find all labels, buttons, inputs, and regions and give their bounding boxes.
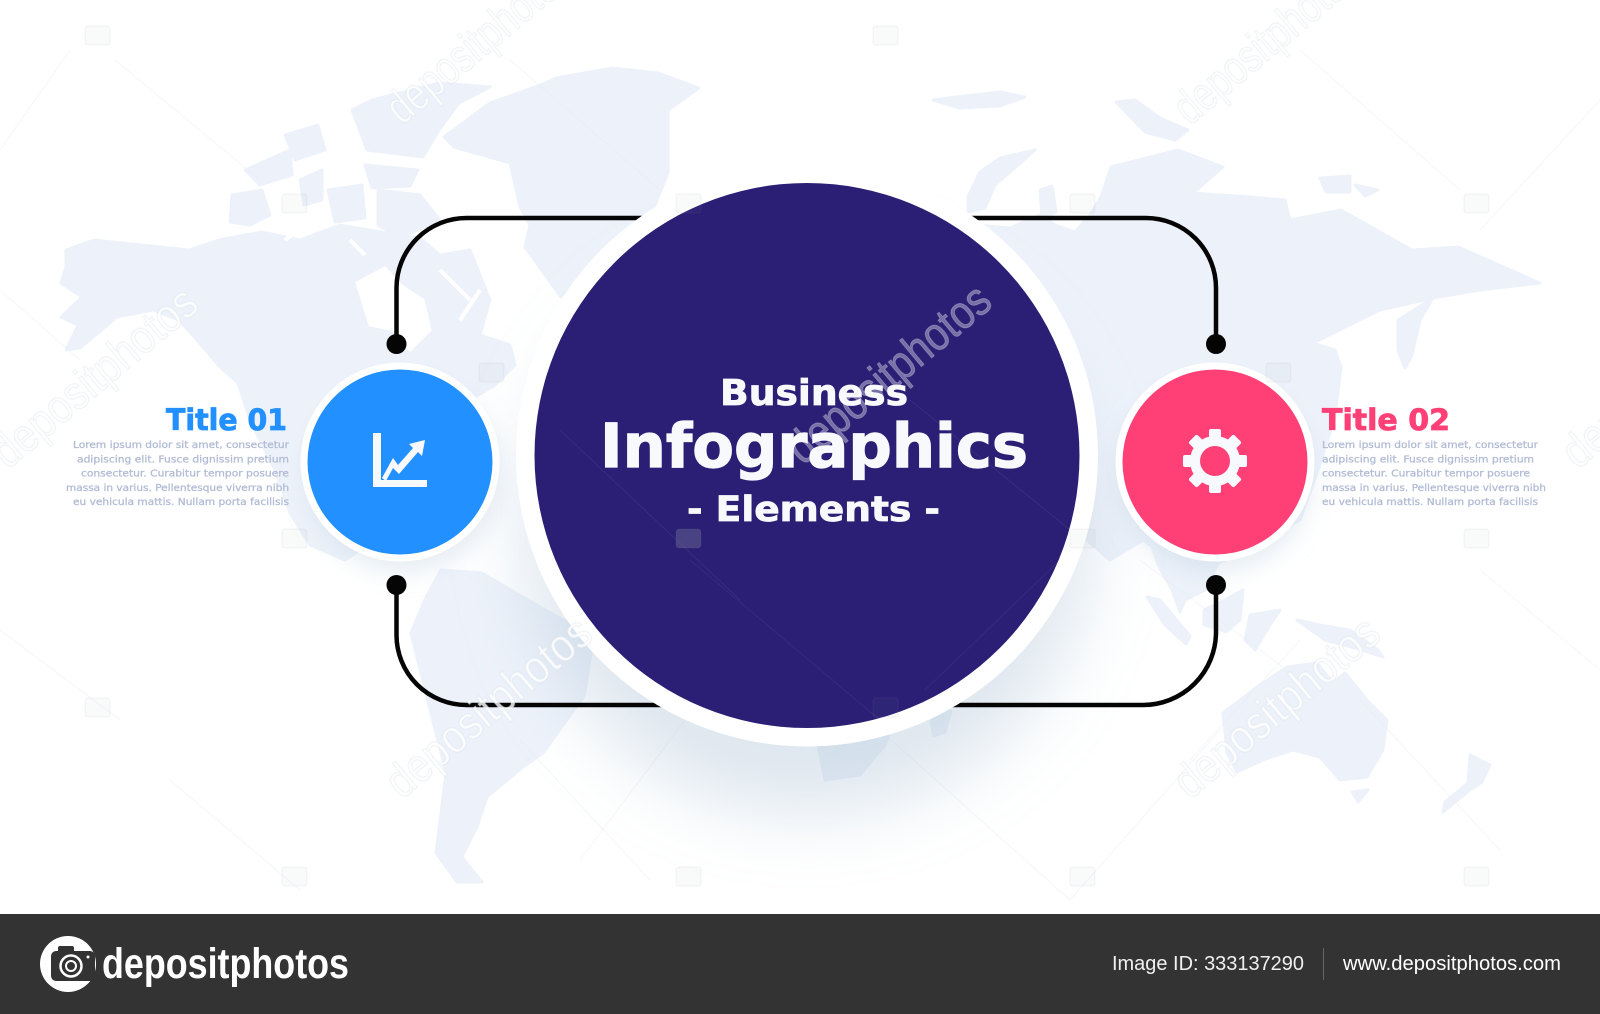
watermark text: depositphotos	[374, 605, 601, 808]
right body text: massa in varius. Pellentesque viverra nibh	[1322, 483, 1546, 494]
new zealand	[1443, 755, 1490, 812]
scandinavia	[968, 150, 1035, 212]
left body text	[66, 440, 290, 508]
footer website url: www.depositphotos.com	[1342, 953, 1561, 975]
bottom right connector	[940, 585, 1216, 705]
left body text: consectetur. Curabitur tempor posuere	[81, 468, 289, 480]
center heading	[600, 373, 1028, 530]
icon: growth chart	[373, 433, 427, 487]
new guinea	[1297, 620, 1383, 657]
center heading: - Elements -	[687, 490, 940, 530]
watermark text	[0, 0, 1600, 808]
right circle shadow	[1118, 378, 1312, 572]
north america	[61, 83, 515, 560]
right body text: eu vehicula mattis. Nullam porta facilisis	[1322, 497, 1538, 508]
indochina	[1150, 540, 1220, 612]
australia	[1223, 663, 1387, 780]
top right connector	[960, 218, 1216, 344]
watermark camera icons	[85, 26, 1489, 886]
center heading: Business	[720, 373, 908, 414]
left title block: Title 01	[166, 403, 287, 437]
footer image id: Image ID: 333137290	[1112, 953, 1304, 975]
top left connector	[396, 218, 660, 344]
left body text: Lorem ipsum dolor sit amet, consectetur	[73, 440, 290, 451]
bottom left connector	[396, 585, 680, 705]
footer bar	[0, 914, 1600, 1014]
south america	[411, 570, 594, 882]
left circle shadow	[307, 378, 501, 572]
left body text: eu vehicula mattis. Nullam porta facilisis	[73, 497, 289, 508]
tasmania	[1352, 790, 1368, 802]
right body text: consectetur. Curabitur tempor posuere	[1322, 468, 1530, 480]
connector lines	[396, 218, 1216, 705]
footer logo icon	[40, 936, 96, 992]
madagascar	[931, 708, 951, 736]
center heading: Infographics	[600, 411, 1028, 482]
right body text	[1322, 440, 1546, 508]
world map background	[61, 68, 1540, 882]
right pink circle	[1116, 362, 1314, 562]
arctic islands	[933, 92, 1025, 108]
left body text: massa in varius. Pellentesque viverra nibh	[66, 483, 289, 494]
left title block	[66, 403, 290, 508]
greenland	[444, 68, 699, 297]
left body text: adipiscing elit. Fusce dignissim pretium	[77, 454, 289, 466]
main circle	[516, 164, 1098, 746]
right body text: Lorem ipsum dolor sit amet, consectetur	[1322, 440, 1539, 451]
icon: gear	[1183, 429, 1247, 493]
borneo	[1204, 590, 1243, 632]
africa south	[700, 600, 905, 780]
main circle shadow	[522, 245, 1092, 815]
right title block	[1322, 403, 1546, 508]
right body text: adipiscing elit. Fusce dignissim pretium	[1322, 454, 1534, 466]
footer logo wordmark: depositphotos	[102, 940, 349, 988]
russian far east peninsula	[1398, 298, 1433, 368]
eurasia	[960, 150, 1540, 590]
left blue circle	[300, 362, 500, 562]
sumatra	[1147, 597, 1190, 644]
connector dots	[386, 334, 1226, 595]
indonesia islands	[1245, 610, 1280, 650]
center watermark: depositphotos	[775, 272, 1001, 474]
right title block: Title 02	[1322, 403, 1450, 437]
watermark text: depositphotos	[1162, 605, 1389, 808]
